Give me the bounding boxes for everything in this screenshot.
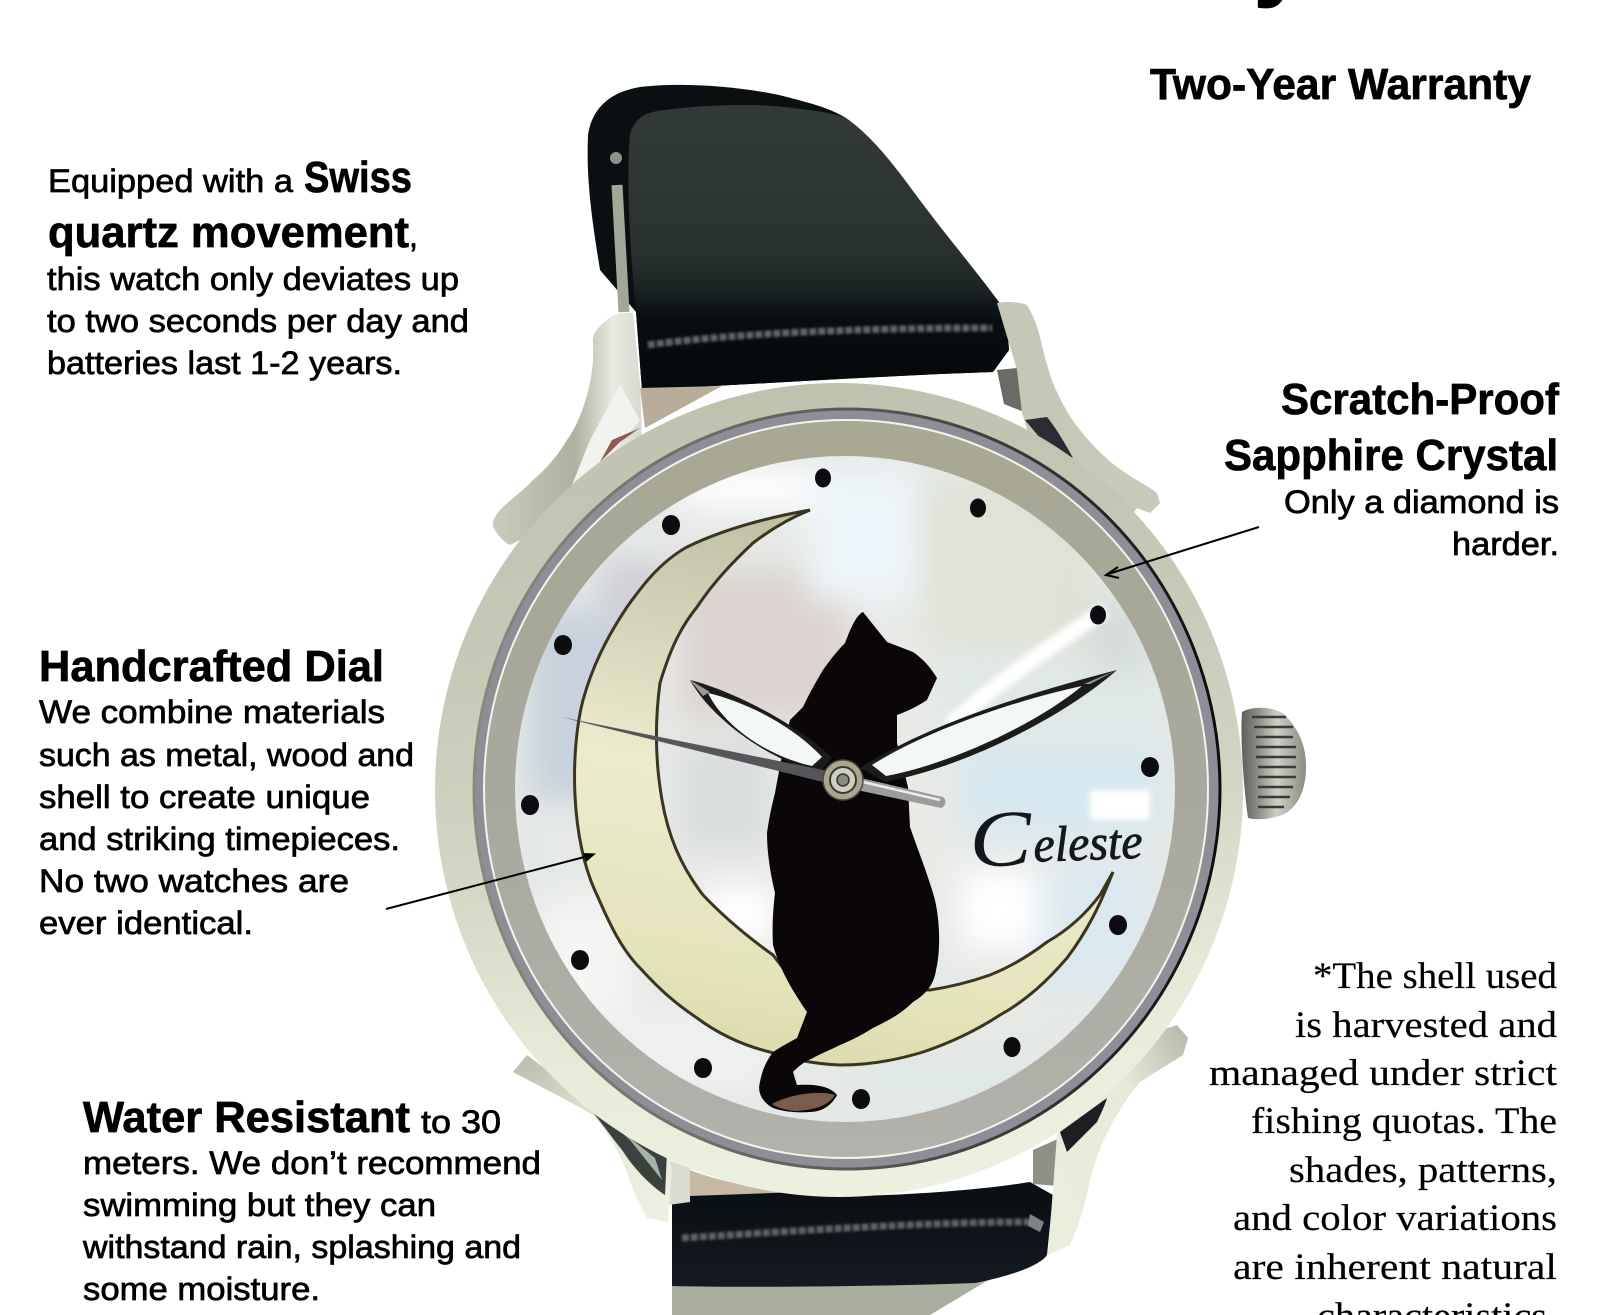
black cat silhouette	[759, 612, 939, 1112]
text: scratch-proof sapphire crystal	[1224, 375, 1559, 562]
text: handcrafted dial: shell to create unique	[39, 779, 370, 815]
Celeste brand script: eleste	[1032, 813, 1143, 873]
text: shell note: and color variations	[1233, 1198, 1557, 1239]
text: water resistant: meters. We don’t recommend	[83, 1145, 541, 1181]
text: swiss quartz movement: quartz movement	[48, 208, 409, 257]
hour hand	[690, 680, 832, 772]
lug: bottom left	[513, 1055, 672, 1222]
text: water resistant: to 30	[421, 1104, 501, 1140]
lug highlight	[566, 385, 640, 500]
bottom strap grey underside	[672, 1256, 1046, 1315]
text: swiss quartz movement: to two seconds per day and	[47, 303, 469, 339]
lugs	[493, 302, 1188, 1255]
mother-of-pearl dial	[500, 450, 1190, 1130]
text: shell note: shades, patterns,	[1289, 1150, 1557, 1191]
text: swiss quartz movement	[47, 153, 469, 381]
centre pivot	[823, 760, 863, 800]
watch hands	[561, 670, 1117, 808]
text: handcrafted dial	[39, 642, 414, 941]
crescent moon	[575, 510, 1113, 1065]
second hand	[561, 717, 843, 787]
text: swiss quartz movement: this watch only deviates up	[47, 261, 459, 297]
lug: bottom right	[1048, 1025, 1188, 1255]
lug bars and gaps	[640, 368, 1060, 1205]
text: scratch-proof sapphire crystal: harder.	[1452, 526, 1559, 562]
arrow: to sapphire crystal	[1106, 527, 1259, 578]
text: handcrafted dial: such as metal, wood and	[39, 737, 414, 773]
text: shell note: is harvested and	[1295, 1005, 1558, 1046]
text: scratch-proof sapphire crystal: Scratch-Proof	[1281, 375, 1559, 424]
text: handcrafted dial: No two watches are	[39, 863, 349, 899]
text: handcrafted dial: We combine materials	[39, 694, 385, 730]
top strap	[588, 85, 1009, 390]
text: shell note: *The shell used	[1313, 956, 1558, 997]
crown	[1241, 708, 1306, 819]
text: handcrafted dial: and striking timepieces.	[39, 821, 400, 857]
text: water resistant: some moisture.	[83, 1271, 320, 1307]
text: water resistant: Water Resistant	[83, 1093, 410, 1142]
text: swiss quartz movement: batteries last 1-2 years.	[47, 345, 402, 381]
text: handcrafted dial: Handcrafted Dial	[39, 642, 384, 691]
text: swiss quartz movement: Equipped with a	[48, 163, 293, 199]
text: scratch-proof sapphire crystal: Sapphire Crystal	[1224, 431, 1558, 480]
hour markers	[521, 468, 1159, 1109]
text: water resistant: swimming but they can	[83, 1187, 436, 1223]
text: water resistant: withstand rain, splashing and	[82, 1229, 521, 1265]
text: two-year warranty: Two-Year Warranty	[1150, 60, 1531, 109]
Celeste brand script	[968, 791, 1144, 885]
text: shell note: managed under strict	[1209, 1053, 1558, 1094]
Celeste brand script: C	[968, 795, 1035, 885]
text: shell note: are inherent natural	[1233, 1247, 1557, 1288]
minute hand	[860, 670, 1117, 782]
text: swiss quartz movement: ,	[409, 218, 418, 254]
lug: top right	[997, 302, 1160, 560]
watch photo	[435, 85, 1306, 1315]
arrow: to handcrafted dial	[386, 853, 596, 909]
text: swiss quartz movement: Swiss	[304, 153, 412, 202]
text: shell note: fishing quotas. The	[1251, 1101, 1557, 1142]
lug: top left	[493, 313, 642, 545]
bottom strap	[672, 1182, 1053, 1287]
text: handcrafted dial: ever identical.	[39, 905, 253, 941]
text: scratch-proof sapphire crystal: Only a diamond is	[1284, 484, 1559, 520]
text: shell note	[1209, 956, 1558, 1315]
case	[435, 383, 1243, 1197]
text: water resistant	[82, 1093, 541, 1307]
